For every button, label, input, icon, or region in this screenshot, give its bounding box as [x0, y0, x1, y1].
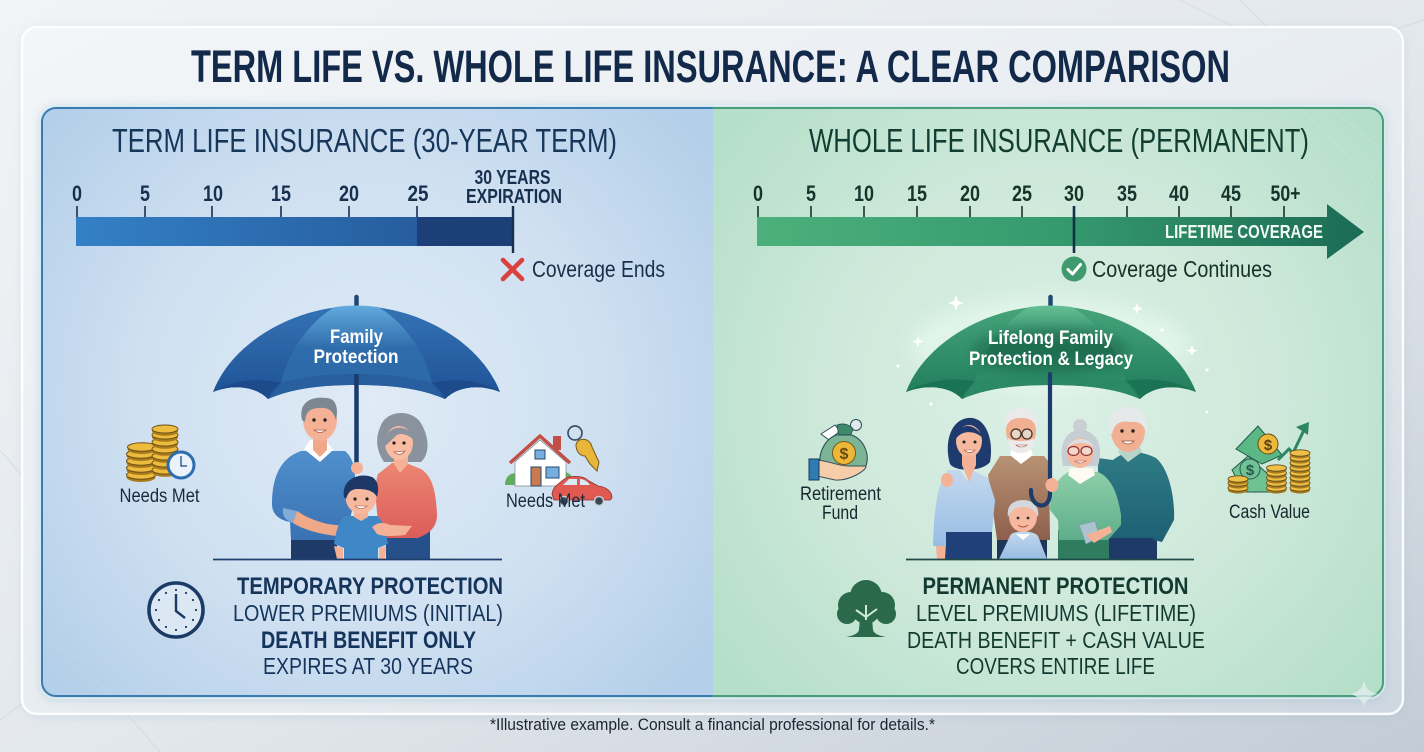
- text block: term summary: [233, 573, 503, 679]
- text block: term summary: EXPIRES AT 30 YEARS: [263, 653, 473, 679]
- umbrella label: [969, 327, 1133, 370]
- label: coverage ends: Coverage Ends: [532, 256, 665, 282]
- timeline: lifetime coverage: 10: [854, 181, 874, 206]
- icon: corner sparkle: [1350, 680, 1378, 706]
- timeline: lifetime coverage: 5: [806, 181, 816, 206]
- label: needs met left: Needs Met: [120, 486, 200, 507]
- text block: whole life summary: PERMANENT PROTECTION: [922, 573, 1188, 600]
- icon: red cross: [503, 260, 522, 279]
- panel: whole life insurance: [713, 108, 1383, 696]
- timeline: 30-year term: [72, 167, 562, 253]
- label: retirement fund: Fund: [822, 503, 858, 524]
- timeline: 30-year term: 30 YEARS: [474, 167, 550, 189]
- umbrella label: [314, 327, 398, 368]
- label: cash value: Cash Value: [1229, 502, 1310, 523]
- text block: term summary: TEMPORARY PROTECTION: [237, 573, 503, 600]
- text block: whole life summary: [907, 573, 1205, 679]
- timeline: lifetime coverage: 20: [960, 181, 980, 206]
- icon: blue umbrella: [213, 297, 500, 466]
- icon: retirement fund: [809, 420, 867, 480]
- timeline: lifetime coverage: 45: [1221, 181, 1241, 206]
- icon: green umbrella: [906, 297, 1196, 399]
- right panel background: [713, 108, 1383, 696]
- left panel background: [42, 108, 713, 696]
- label: retirement fund: [800, 484, 882, 524]
- icon: cash value: $: [1246, 462, 1255, 479]
- timeline: lifetime coverage: 40: [1169, 181, 1189, 206]
- timeline: 30-year term: 25: [408, 181, 428, 206]
- label: needs met right: Needs Met: [506, 491, 586, 512]
- text block: whole life summary: DEATH BENEFIT + CASH VALUE: [907, 627, 1205, 653]
- timeline: 30-year term: 10: [203, 181, 223, 206]
- icon: clock: [149, 583, 203, 637]
- umbrella label: Protection & Legacy: [969, 348, 1133, 370]
- timeline: 30-year term: EXPIRATION: [466, 186, 562, 208]
- text block: term summary: LOWER PREMIUMS (INITIAL): [233, 600, 503, 626]
- icon: house, key and car: [505, 426, 612, 506]
- text block: whole life summary: LEVEL PREMIUMS (LIFETIME): [916, 600, 1196, 626]
- timeline: lifetime coverage: 50+: [1270, 181, 1300, 206]
- ground line: [213, 558, 502, 560]
- panel border: [40, 106, 1385, 698]
- timeline: lifetime coverage: 35: [1117, 181, 1137, 206]
- text block: whole life summary: COVERS ENTIRE LIFE: [956, 653, 1155, 679]
- heading: term life: TERM LIFE INSURANCE (30-YEAR TERM): [112, 122, 617, 159]
- timeline: 30-year term: 5: [140, 181, 150, 206]
- icon: cash value: [1228, 422, 1310, 494]
- umbrella label: Protection: [314, 347, 398, 368]
- timeline: lifetime coverage: 0: [753, 181, 763, 206]
- icon: retirement fund: $: [840, 446, 849, 463]
- icon: coins and clock: [126, 425, 194, 482]
- text block: term summary: DEATH BENEFIT ONLY: [261, 627, 476, 654]
- timeline: 30-year term: 0: [72, 181, 82, 206]
- label: coverage continues: Coverage Continues: [1092, 256, 1272, 282]
- footnote: *Illustrative example. Consult a financial professional for details.*: [490, 715, 935, 734]
- illustration: family of three: [272, 398, 437, 559]
- timeline: 30-year term: 20: [339, 181, 359, 206]
- timeline: 30-year term: 15: [271, 181, 291, 206]
- label: retirement fund: Retirement: [800, 484, 882, 505]
- panel: term life insurance: [42, 108, 713, 696]
- icon: sparkles: [896, 295, 1209, 413]
- timeline: lifetime coverage: 15: [907, 181, 927, 206]
- umbrella label: Lifelong Family: [988, 327, 1113, 349]
- timeline: lifetime coverage: [753, 181, 1364, 259]
- illustration: multigenerational family: [933, 374, 1174, 559]
- timeline: lifetime coverage: 25: [1012, 181, 1032, 206]
- ground line: [906, 558, 1194, 560]
- timeline: lifetime coverage: 30: [1064, 181, 1084, 206]
- icon: tree: [837, 580, 896, 637]
- icon: green check: [1062, 256, 1086, 282]
- timeline: lifetime coverage: LIFETIME COVERAGE: [1165, 222, 1323, 242]
- icon: cash value: $: [1264, 437, 1273, 454]
- umbrella label: Family: [330, 327, 383, 348]
